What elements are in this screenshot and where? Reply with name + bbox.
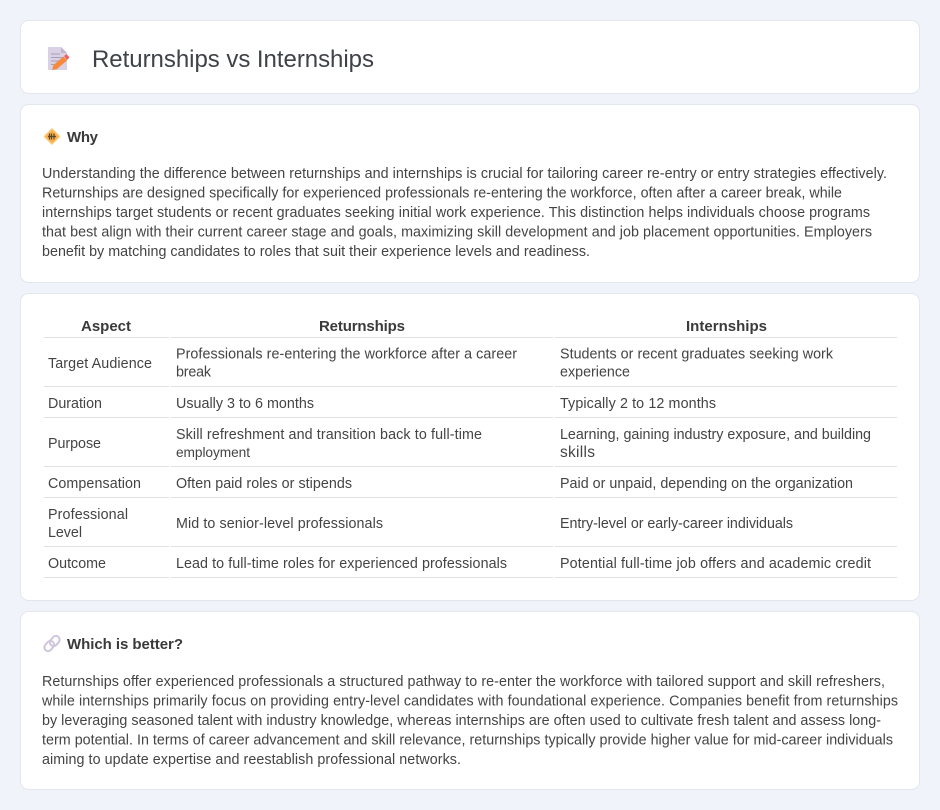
- text block: which is better paragraph: by leveraging seasoned talent with industry knowledge, whereas internships are often used to cultivate fresh talent and assess long-: [42, 713, 881, 729]
- text block: why paragraph: Understanding the difference between returnships and internships is crucial for tailoring career re-entry or entry strategies effectively.: [42, 166, 887, 182]
- row: compensation: [48, 476, 853, 492]
- row: purpose: Purpose: [48, 436, 101, 452]
- row: target audience: experience: [560, 364, 630, 380]
- row: outcome: Outcome: [48, 556, 106, 572]
- icon: chain link: [43, 634, 61, 653]
- row: purpose: employment: [176, 445, 250, 460]
- row: purpose: Learning, gaining industry exposure, and building: [560, 427, 871, 443]
- text block: why paragraph: Returnships are designed specifically for experienced professionals re-entering the workforce, often after a career break, while: [42, 186, 842, 202]
- row: duration: Usually 3 to 6 months: [176, 396, 314, 412]
- heading: why: Why: [67, 129, 99, 146]
- panel: comparison table: [20, 294, 920, 600]
- text block: why paragraph: benefit by matching candidates to roles that suit their experience levels and readiness.: [42, 244, 590, 260]
- table header row: Internships: [686, 318, 767, 335]
- panel: which is better: [20, 612, 920, 790]
- row: target audience: break: [176, 364, 212, 380]
- table header row: Aspect: [81, 318, 131, 335]
- text block: why paragraph: internships target students or recent graduates seeking initial work experience. This distinction helps individuals choose programs: [42, 205, 870, 221]
- text block: which is better paragraph: [41, 674, 898, 768]
- row: compensation: Often paid roles or stipends: [176, 476, 352, 492]
- icon: document with pencil: [48, 47, 70, 70]
- row: outcome: Potential full-time job offers and academic credit: [560, 556, 871, 572]
- row: duration: Typically 2 to 12 months: [560, 396, 716, 412]
- row: duration: Duration: [48, 396, 102, 412]
- panel: why: [20, 104, 920, 282]
- title: Returnships vs Internships: [92, 46, 374, 73]
- row: purpose: skills: [560, 444, 595, 461]
- row: professional level: Professional: [48, 507, 128, 523]
- heading: which is better: Which is better?: [67, 636, 183, 653]
- row: purpose: [48, 427, 871, 461]
- row: target audience: Target Audience: [48, 356, 152, 372]
- panel: title header: [20, 20, 920, 94]
- text block: which is better paragraph: Returnships offer experienced professionals a structured pathway to re-enter the workforce with tailored support and skill refreshers,: [42, 674, 885, 690]
- row: outcome: Lead to full-time roles for experienced professionals: [176, 556, 507, 572]
- text block: which is better paragraph: term potential. In terms of career advancement and skill relevance, returnships typically provide higher value for mid-career individuals: [42, 732, 893, 748]
- table header row: [81, 318, 767, 335]
- text block: why paragraph: [42, 166, 887, 260]
- icon: crossing sign diamond: [44, 129, 60, 144]
- text block: which is better paragraph: while internships primarily focus on providing entry-level candidates with foundational experience. Companies benefit from returnships: [41, 694, 898, 710]
- row: target audience: [48, 346, 834, 380]
- row: compensation: Paid or unpaid, depending on the organization: [560, 476, 853, 492]
- row: target audience: Students or recent graduates seeking work: [560, 346, 834, 362]
- text block: why paragraph: that best align with their current career stage and goals, maximizing skill development and job placement opportunities. Employers: [42, 224, 872, 240]
- row: professional level: Entry-level or early-career individuals: [560, 516, 793, 532]
- row: professional level: Mid to senior-level professionals: [176, 516, 383, 532]
- row: professional level: [48, 507, 793, 541]
- row: outcome: [48, 556, 871, 572]
- text block: which is better paragraph: aiming to update expertise and reestablish professional networks.: [42, 752, 461, 768]
- row: compensation: Compensation: [48, 476, 141, 492]
- row: professional level: Level: [48, 525, 82, 541]
- row: duration: [48, 396, 716, 412]
- table header row: Returnships: [319, 318, 405, 335]
- row: purpose: Skill refreshment and transition back to full-time: [176, 427, 482, 443]
- row: target audience: Professionals re-entering the workforce after a career: [176, 346, 517, 362]
